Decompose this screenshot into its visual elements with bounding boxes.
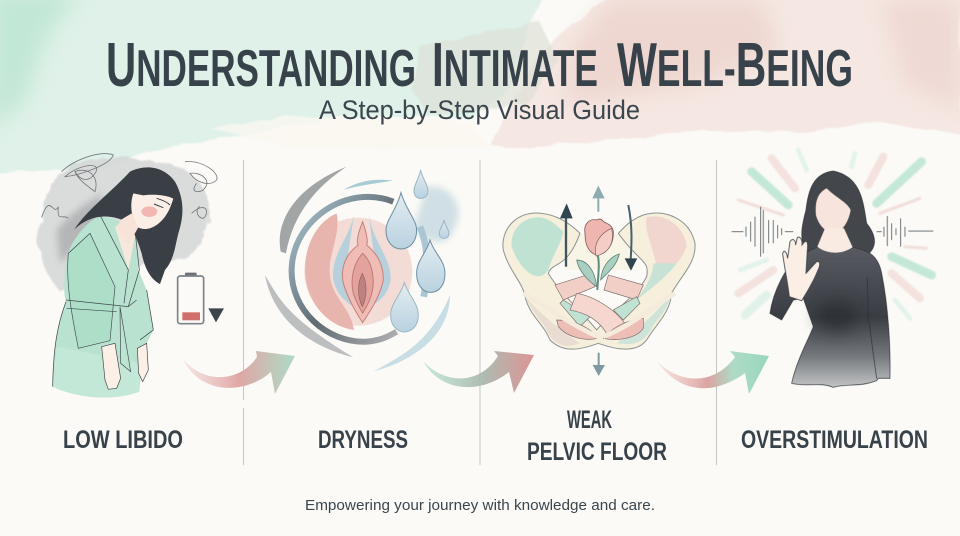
icon: grey mood cloud [39, 156, 211, 290]
icon: motion arrows [560, 186, 637, 376]
faceless head [816, 188, 851, 233]
stop hand [783, 237, 820, 301]
dividers [244, 160, 716, 465]
title [106, 31, 853, 100]
watercolor header wash [0, 0, 960, 175]
abstract petal form [333, 213, 391, 323]
dark hair [802, 171, 874, 254]
label: dryness: DRYNESS [318, 426, 408, 454]
labels [63, 406, 928, 466]
title: INTIMATE [432, 31, 598, 100]
label: low libido: LOW LIBIDO [63, 426, 183, 454]
arrow: dryness to pelvic floor [423, 351, 534, 393]
panel: overstimulation [732, 150, 933, 387]
label: weak pelvic floor: WEAK [567, 406, 612, 434]
title: UNDERSTANDING [106, 31, 416, 100]
panel: weak pelvic floor [503, 186, 695, 376]
hands [102, 343, 121, 389]
hair [74, 167, 182, 284]
sound waves [732, 207, 933, 257]
dress figure [770, 247, 890, 387]
icon: scribble lines [42, 154, 217, 218]
arrow: pelvic floor to overstimulation [657, 351, 769, 394]
icon: low battery [178, 273, 224, 324]
icon: water drops [386, 171, 449, 332]
abstract watercolor swirl strokes [265, 167, 459, 372]
pink disc [304, 218, 412, 326]
label: weak pelvic floor: PELVIC FLOOR [527, 438, 667, 466]
radiating rays [738, 150, 932, 318]
panel: low libido [39, 154, 224, 398]
title: WELL-BEING [617, 31, 853, 100]
icon: flower bud [577, 219, 619, 290]
subtitle: A Step-by-Step Visual Guide [319, 95, 640, 125]
pelvis basin [503, 213, 695, 349]
woven muscle bands [555, 274, 643, 340]
footer tagline: Empowering your journey with knowledge and care. [305, 497, 655, 514]
robed figure [53, 167, 182, 398]
ring [292, 197, 397, 342]
label: weak pelvic floor [527, 406, 667, 466]
panel: dryness [265, 167, 459, 372]
arrow: low libido to dryness [183, 351, 295, 394]
